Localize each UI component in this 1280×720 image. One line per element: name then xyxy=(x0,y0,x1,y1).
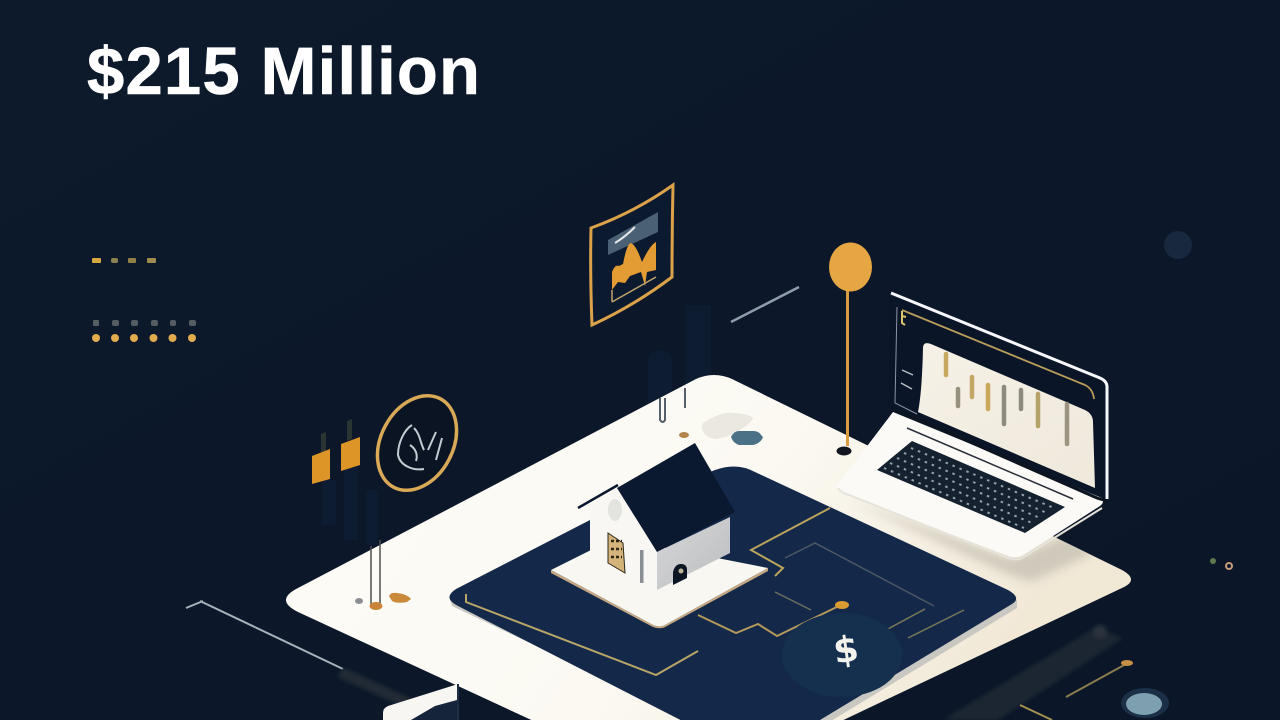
clips xyxy=(660,388,685,422)
house base xyxy=(551,538,768,626)
grey diagonal line xyxy=(731,287,799,322)
framed chart card xyxy=(591,185,673,325)
dollar coin: $ xyxy=(831,628,861,673)
faint background circle xyxy=(1164,231,1192,259)
round badge icon xyxy=(362,382,472,504)
house right wall xyxy=(657,517,730,590)
laptop base xyxy=(836,412,1103,558)
legend: gold dot row xyxy=(92,320,196,342)
hinge line xyxy=(907,428,1073,499)
platform shadow under laptop xyxy=(874,509,1092,584)
small stand xyxy=(355,540,411,610)
title: $215 Million xyxy=(87,34,481,109)
platform xyxy=(286,375,1131,720)
small monitor corner at bottom xyxy=(383,684,458,720)
screen chart panel xyxy=(918,343,1095,488)
house door xyxy=(673,564,687,585)
small dots on right xyxy=(1210,558,1232,569)
keyboard xyxy=(877,441,1065,533)
gold tags xyxy=(312,419,360,484)
lower-left pointer line xyxy=(186,601,410,704)
legend: small gold markers xyxy=(92,258,156,263)
house roof xyxy=(617,443,735,552)
faint ghost bars xyxy=(322,305,711,545)
dollar coin xyxy=(782,613,902,697)
wall smudge xyxy=(608,499,622,521)
pin marker xyxy=(829,242,872,456)
house xyxy=(551,443,768,628)
lower-right shadow and pin xyxy=(943,625,1169,720)
house left wall xyxy=(590,488,658,590)
lid hinge shadow xyxy=(893,410,1107,501)
side slit xyxy=(640,550,644,583)
house window xyxy=(608,533,625,573)
laptop screen lid xyxy=(889,292,1108,500)
navy mat xyxy=(449,466,1017,720)
teal tag xyxy=(731,431,763,445)
small brown spot xyxy=(679,432,689,438)
mat gold circuit lines xyxy=(466,508,964,675)
roof eave xyxy=(578,485,618,508)
screen bezel trim xyxy=(902,310,1094,399)
smudge on platform xyxy=(702,413,753,439)
laptop xyxy=(836,292,1108,560)
